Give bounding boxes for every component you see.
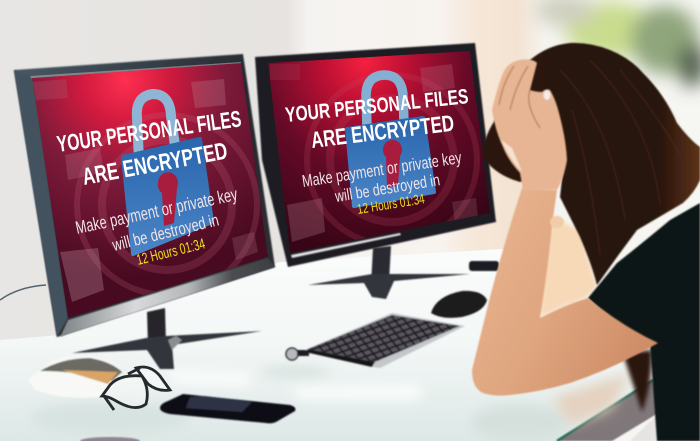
shirt (588, 203, 700, 441)
cable behind left monitor (0, 285, 46, 300)
padlock: right (347, 75, 434, 206)
object at bottom edge (80, 437, 140, 441)
lower hair strands (622, 350, 652, 412)
monitor frame: right (255, 43, 496, 267)
screen text: left: Make payment or private key (74, 184, 239, 238)
screen text: right (284, 85, 470, 217)
woman with head in hands (472, 43, 700, 441)
monitor stand: left (72, 308, 262, 369)
screen: left (32, 63, 268, 318)
screen text: right: 12 Hours 01:34 (356, 190, 426, 217)
ear (550, 216, 564, 228)
screen text: left: ARE ENCRYPTED (80, 138, 230, 191)
white object with tan top (28, 356, 122, 398)
padlock: left (123, 94, 212, 254)
screen text: right: will be destroyed in (333, 171, 441, 206)
eyeglasses (102, 367, 170, 410)
screen text: left: will be destroyed in (110, 210, 221, 255)
hand (492, 59, 567, 190)
screen text: left (55, 105, 243, 269)
arm (472, 188, 658, 396)
smartphone (160, 394, 295, 423)
black object behind keyboard (469, 261, 499, 271)
glass table edge (552, 372, 662, 441)
desk surface (0, 248, 640, 441)
screen text: right: YOUR PERSONAL FILES (284, 85, 470, 127)
computer mouse (431, 291, 487, 318)
neck and chest (540, 217, 597, 317)
monitor stand: right (308, 246, 470, 299)
screen text: left: YOUR PERSONAL FILES (55, 105, 243, 157)
monitor frame: left (14, 54, 275, 337)
screen text: right: ARE ENCRYPTED (309, 110, 456, 153)
screen text: left: 12 Hours 01:34 (135, 235, 207, 269)
keyboard (286, 313, 465, 368)
screen: right (268, 51, 490, 253)
hair (483, 43, 700, 285)
left monitor (14, 54, 275, 369)
screen text: right: Make payment or private key (301, 148, 463, 191)
right monitor (255, 43, 496, 299)
